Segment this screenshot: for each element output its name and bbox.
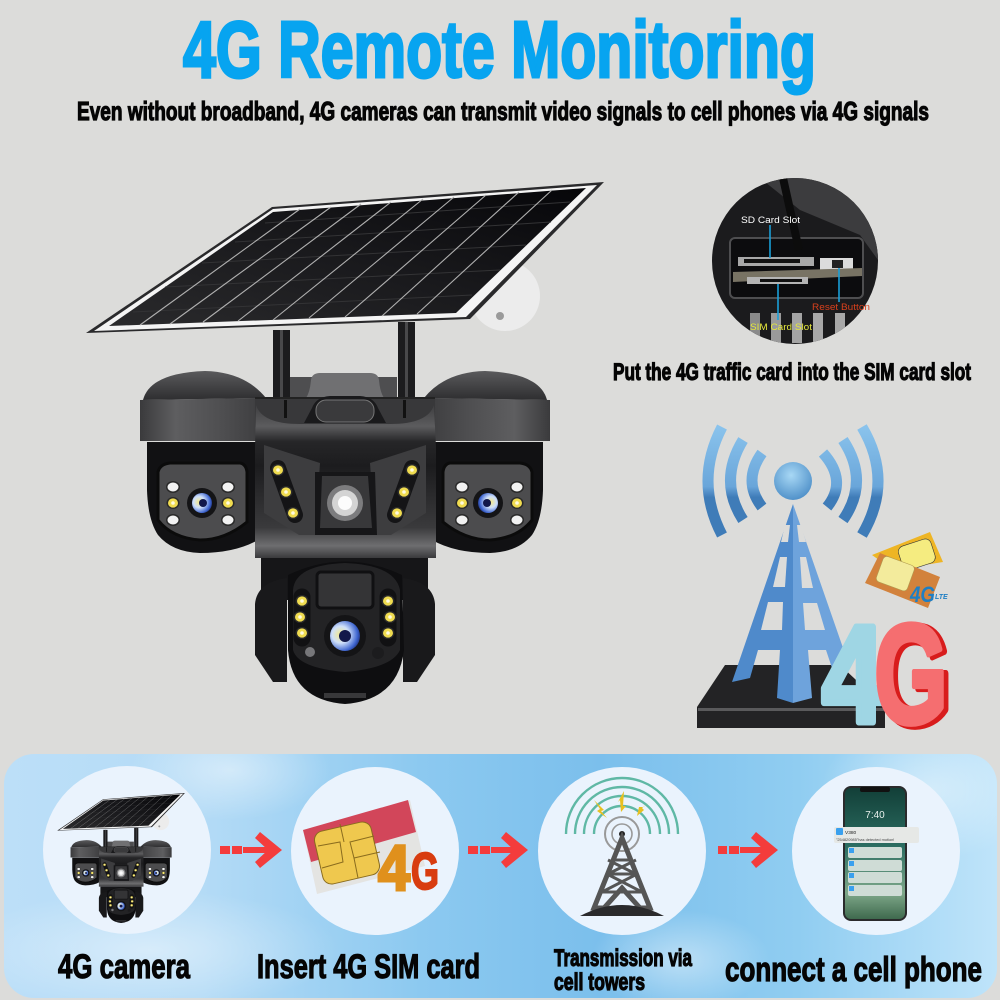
step 3: cell towers <box>538 767 706 996</box>
inset: card slot close-up: SD Card Slot <box>741 215 800 226</box>
icon: antenna sphere <box>774 462 812 500</box>
icon: 3D 4: 4 <box>822 598 884 752</box>
icon: 3D G: G <box>878 597 952 756</box>
icon: phone <box>834 786 919 921</box>
icon: phone: "254820985"has detected motion! <box>836 837 894 842</box>
step 2: insert SIM: Insert 4G SIM card <box>257 948 480 986</box>
inset: card slot close-up: Reset Button <box>812 302 870 313</box>
icon: signal waves <box>708 427 878 535</box>
icon: SIM cards: 4G <box>909 582 935 607</box>
step 2: insert SIM <box>257 767 480 986</box>
icon: SIM cards: LTE <box>935 594 948 601</box>
icon: SIM card: G <box>411 843 439 901</box>
icon: lightning <box>594 791 650 818</box>
icon: SIM card: 4 <box>378 832 410 904</box>
icon: phone: V380 <box>845 830 857 836</box>
arrow <box>220 832 282 868</box>
step 3: cell towers: cell towers <box>554 969 645 996</box>
inset: card slot close-up <box>712 178 878 344</box>
icon: SIM cards <box>865 532 948 608</box>
illustration: 4G signal tower <box>697 427 952 756</box>
icon: SIM card <box>303 800 439 904</box>
icon: base plate <box>697 665 885 728</box>
panel: 4 step flow <box>4 754 997 998</box>
step 1: 4G camera: 4G camera <box>58 948 191 986</box>
main product image: solar camera <box>86 182 604 704</box>
icon: 3D G: G <box>874 595 948 754</box>
icon: 3D G <box>874 595 952 756</box>
step 4: cell phone <box>725 767 982 989</box>
arrow <box>468 832 528 868</box>
step 1: 4G camera <box>43 766 211 986</box>
step 3: cell towers: Transmission via <box>554 945 692 972</box>
inset: card slot close-up: SIM Card Slot <box>750 322 812 333</box>
icon: lattice tower <box>732 504 850 703</box>
arrow <box>718 832 778 868</box>
icon: phone: 7:40 <box>865 810 885 821</box>
icon: signal arcs <box>566 778 678 834</box>
icon: radio tower <box>580 817 664 916</box>
